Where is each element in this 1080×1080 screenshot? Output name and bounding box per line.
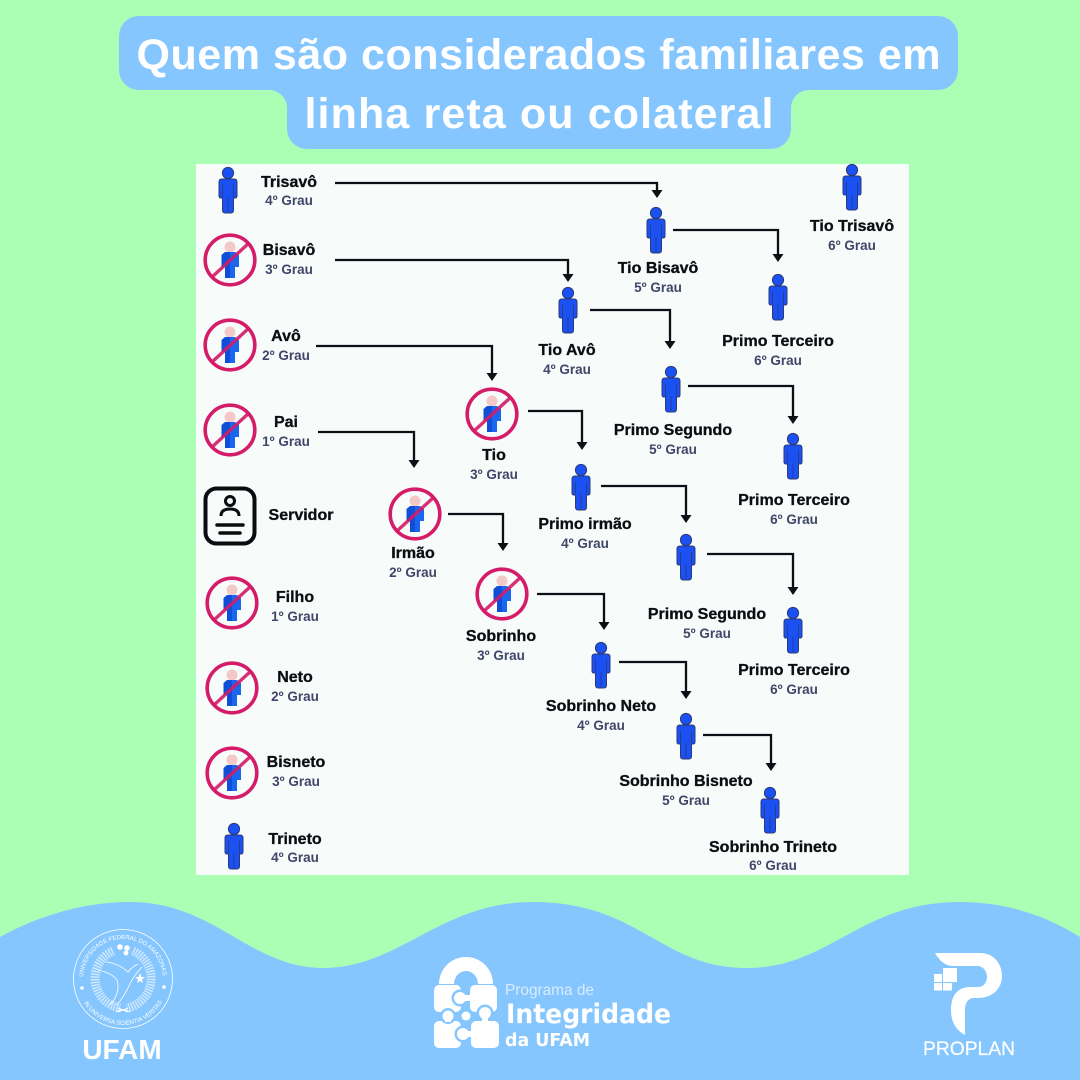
node: Tio Bisavô <box>618 207 699 295</box>
node: Primo irmão: Primo irmão <box>538 516 632 533</box>
node: Neto: 2º Grau <box>271 689 319 704</box>
node: Tio Avô: 4º Grau <box>543 362 591 377</box>
node: Tio <box>467 389 518 482</box>
node: Primo Terceiro (middle) <box>738 433 850 527</box>
node: Bisavô <box>205 235 315 285</box>
node: Primo Segundo (lower): Primo Segundo <box>648 606 766 623</box>
node: Tio Trisavô <box>810 164 894 253</box>
node: Irmão: 2º Grau <box>389 565 437 580</box>
logo: UFAM <box>73 929 173 1065</box>
arrow: Sobrinho to Sobrinho Neto <box>537 594 610 630</box>
node: Servidor: Servidor <box>269 507 333 524</box>
node: Sobrinho Trineto <box>709 787 837 873</box>
node: Sobrinho: 3º Grau <box>477 648 525 663</box>
node: Primo Terceiro (top): 6º Grau <box>754 353 802 368</box>
seal: IN UNIVERSA SCIENTIA VERITAS <box>84 1000 162 1025</box>
node: Sobrinho Bisneto <box>619 713 753 808</box>
node: Primo Segundo (top) <box>614 366 732 457</box>
node: Pai <box>205 405 310 455</box>
icon: servidor badge <box>206 488 254 544</box>
node: Trineto <box>225 823 322 869</box>
node: Filho: 1º Grau <box>271 609 319 624</box>
arrow: Tio Avô to Primo Segundo <box>590 310 676 349</box>
panel background <box>196 164 909 875</box>
UFAM label: UFAM <box>82 1034 162 1065</box>
node: Primo Terceiro (top) <box>722 274 834 368</box>
node: Primo irmão: 4º Grau <box>561 536 609 551</box>
node: Sobrinho Bisneto: 5º Grau <box>662 793 710 808</box>
node: Tio Trisavô: Tio Trisavô <box>810 218 894 235</box>
logo: Programa de Integridade da UFAM <box>434 957 671 1051</box>
node: Sobrinho: Sobrinho <box>466 628 536 645</box>
node: Primo Segundo (top): Primo Segundo <box>614 422 732 439</box>
arrow: Tio to Primo irmão <box>528 411 588 450</box>
node: Sobrinho Neto: Sobrinho Neto <box>546 698 656 715</box>
node: Tio Bisavô: 5º Grau <box>634 280 682 295</box>
node: Bisavô: 3º Grau <box>265 262 313 277</box>
logo text: da UFAM: da UFAM <box>505 1031 590 1051</box>
icon: puzzle padlock <box>434 957 499 1048</box>
node: Irmão: Irmão <box>391 545 435 562</box>
title pill <box>119 16 958 149</box>
node: Primo Segundo (top): 5º Grau <box>649 442 697 457</box>
node: Sobrinho <box>466 569 536 663</box>
title line 1: Quem são considerados familiares em <box>136 31 940 79</box>
logo text: Programa de: Programa de <box>505 982 594 999</box>
node: Tio Avô: Tio Avô <box>538 342 596 359</box>
node: Bisneto: 3º Grau <box>272 774 320 789</box>
node: Primo Segundo (lower): 5º Grau <box>683 626 731 641</box>
node: Tio: 3º Grau <box>470 467 518 482</box>
arrow: Primo Segundo to Primo Terceiro <box>688 386 798 424</box>
arrow: Irmão to Sobrinho <box>448 514 508 551</box>
node: Pai: Pai <box>274 414 298 431</box>
node: Primo Terceiro (lower): Primo Terceiro <box>738 662 850 679</box>
node: Avô <box>205 320 310 370</box>
node: Primo Terceiro (middle): 6º Grau <box>770 512 818 527</box>
arrow: Avô to Tio <box>316 346 498 381</box>
PROPLAN label: PROPLAN <box>923 1038 1015 1060</box>
node: Filho <box>207 578 319 628</box>
node: Primo irmão <box>538 464 632 551</box>
arrow: Bisavô to Tio Avô <box>335 260 574 282</box>
arrow: Tio Bisavô to Primo Terceiro <box>673 230 784 262</box>
logo text: Integridade: Integridade <box>506 999 671 1030</box>
icon: stylised P <box>934 953 1002 1035</box>
node: Tio Bisavô: Tio Bisavô <box>618 260 699 277</box>
arrow: Pai to Irmão <box>318 432 420 468</box>
node: Primo Terceiro (lower): 6º Grau <box>770 682 818 697</box>
node: Avô: Avô <box>271 328 301 345</box>
node: Primo Terceiro (top): Primo Terceiro <box>722 333 834 350</box>
arrow: Primo Segundo to Primo Terceiro (lower) <box>707 554 798 595</box>
node: Avô: 2º Grau <box>262 348 310 363</box>
node: Trineto: 4º Grau <box>271 850 319 865</box>
node: Trisavô: Trisavô <box>261 174 317 191</box>
footer wave <box>0 902 1080 1080</box>
arrow: Trisavô to Tio Bisavô <box>335 183 662 198</box>
node: Tio: Tio <box>482 447 506 464</box>
node: Filho: Filho <box>276 589 314 606</box>
node: Bisneto: Bisneto <box>267 754 326 771</box>
node: Primo Segundo (lower) <box>648 534 766 641</box>
node: Sobrinho Neto: 4º Grau <box>577 718 625 733</box>
arrow: Sobrinho Neto to Sobrinho Bisneto <box>619 662 692 699</box>
seal <box>73 929 173 1029</box>
node: Trineto: Trineto <box>268 831 322 848</box>
logo: PROPLAN <box>923 953 1015 1060</box>
node: Primo Terceiro (lower) <box>738 607 850 697</box>
node: Bisavô: Bisavô <box>263 242 315 259</box>
panel: family tree <box>196 164 909 875</box>
node: Tio Avô <box>538 287 596 377</box>
node: Sobrinho Trineto: 6º Grau <box>749 858 797 873</box>
arrow: Sobrinho Bisneto to Sobrinho Trineto <box>703 735 776 771</box>
node: Trisavô: 4º Grau <box>265 193 313 208</box>
node: Sobrinho Neto <box>546 642 656 733</box>
node: Neto: Neto <box>277 669 313 686</box>
node: Irmão <box>389 489 440 580</box>
node: Bisneto <box>207 748 326 798</box>
title line 2: linha reta ou colateral <box>304 90 774 138</box>
node: Sobrinho Trineto: Sobrinho Trineto <box>709 839 837 856</box>
title <box>119 16 958 149</box>
node: Neto <box>207 663 319 713</box>
node: Servidor <box>206 488 333 544</box>
node: Tio Trisavô: 6º Grau <box>828 238 876 253</box>
node: Trisavô <box>219 167 317 213</box>
seal: UNIVERSIDADE FEDERAL DO AMAZONAS <box>79 934 167 976</box>
node: Primo Terceiro (middle): Primo Terceiro <box>738 492 850 509</box>
arrow: Primo irmão to Primo Segundo <box>601 486 692 523</box>
node: Sobrinho Bisneto: Sobrinho Bisneto <box>619 773 753 790</box>
node: Pai: 1º Grau <box>262 434 310 449</box>
